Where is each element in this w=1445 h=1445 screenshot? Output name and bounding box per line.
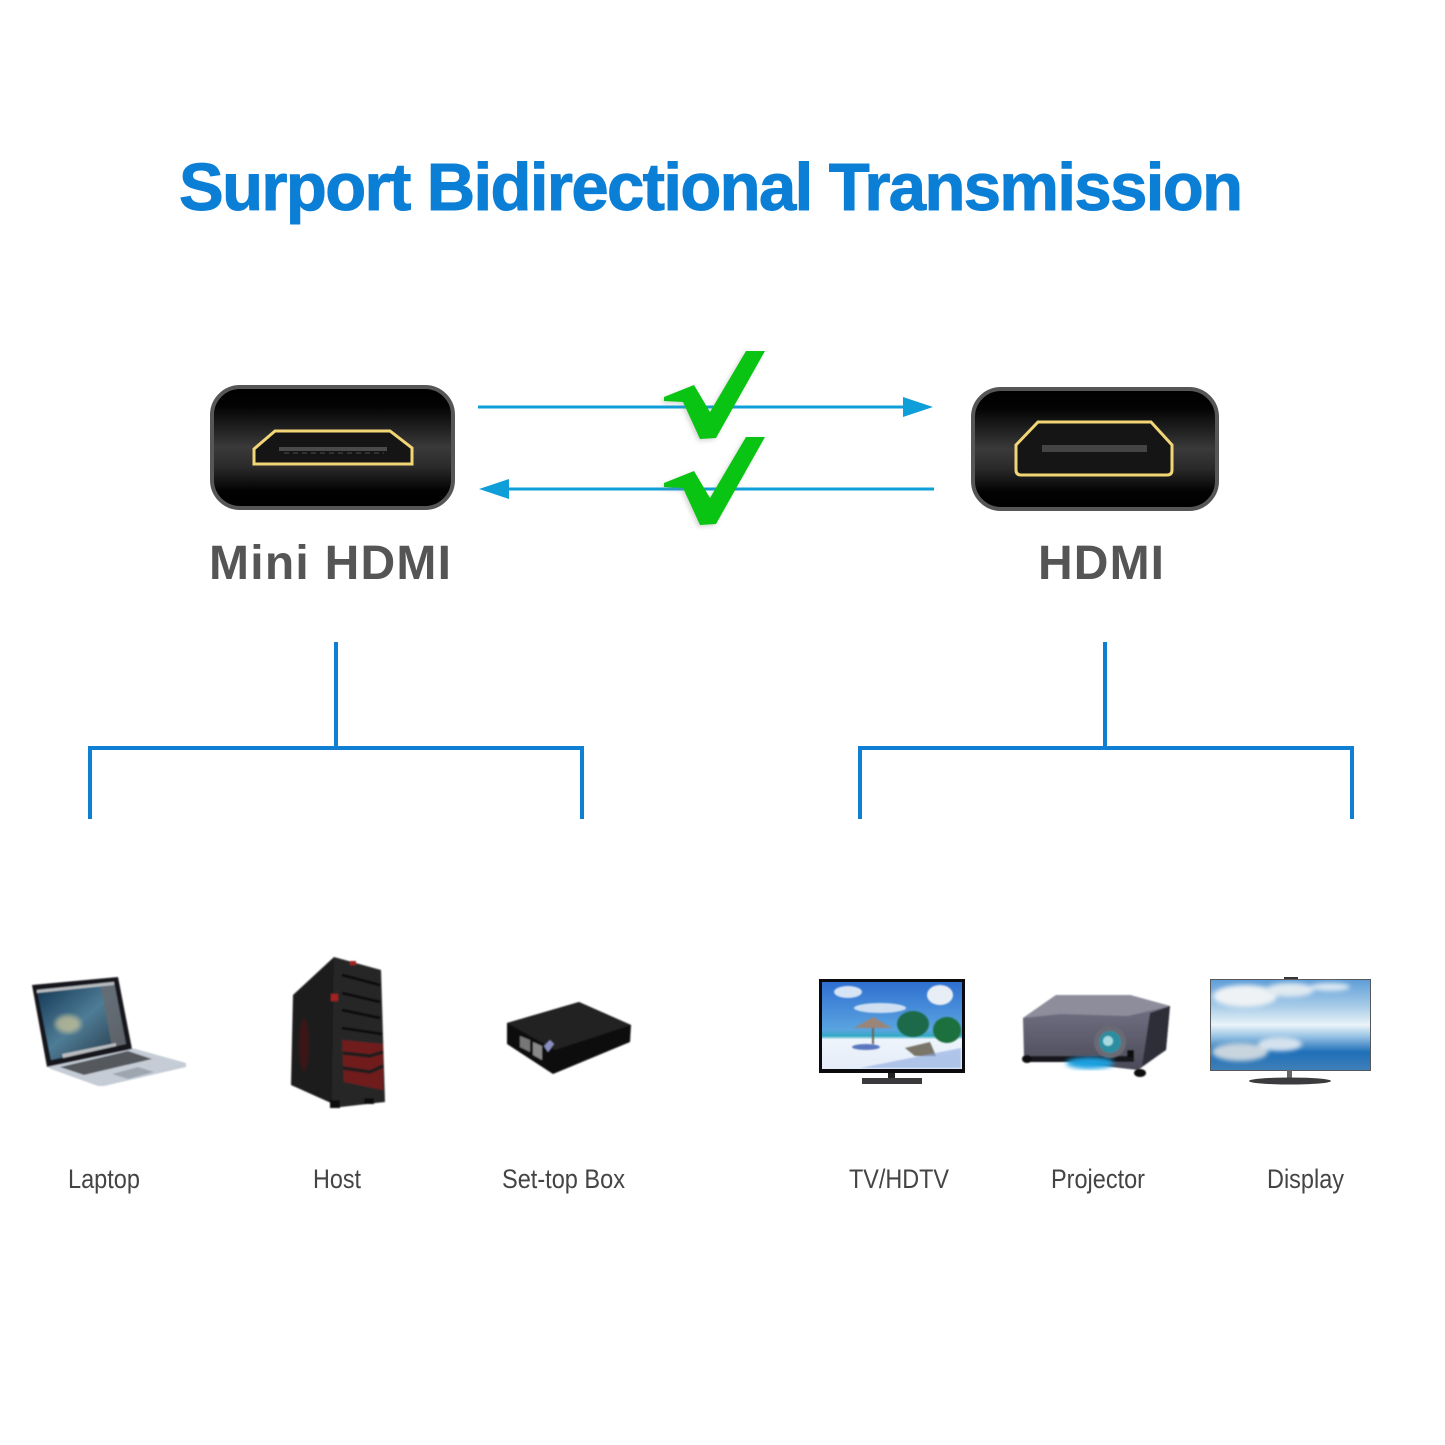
label: Laptop: Laptop — [68, 1164, 140, 1194]
arrow: HDMI to Mini HDMI — [479, 479, 934, 499]
connector: HDMI port — [973, 389, 1217, 509]
label: Display: Display — [1267, 1164, 1344, 1194]
device: display — [1210, 977, 1371, 1084]
title: Surport Bidirectional Transmission — [179, 150, 1243, 225]
bracket: Mini HDMI devices — [90, 642, 582, 819]
label: HDMI: HDMI — [1038, 537, 1164, 590]
label: Projector: Projector — [1051, 1164, 1145, 1194]
label: TV/HDTV: TV/HDTV — [849, 1164, 949, 1194]
connector: Mini HDMI port — [212, 387, 453, 508]
device: host tower — [291, 957, 385, 1108]
arrow: Mini HDMI to HDMI — [478, 397, 933, 417]
device: projector — [1022, 995, 1170, 1077]
device: laptop — [32, 977, 186, 1086]
label: Host: Host — [313, 1164, 361, 1194]
icon: green check bottom — [662, 437, 765, 527]
device: set-top box — [507, 1002, 631, 1074]
device: TV — [819, 979, 965, 1084]
label: Mini HDMI: Mini HDMI — [209, 537, 451, 590]
label: Set-top Box: Set-top Box — [502, 1164, 625, 1194]
icon: green check top — [662, 351, 765, 441]
bracket: HDMI devices — [860, 642, 1352, 819]
